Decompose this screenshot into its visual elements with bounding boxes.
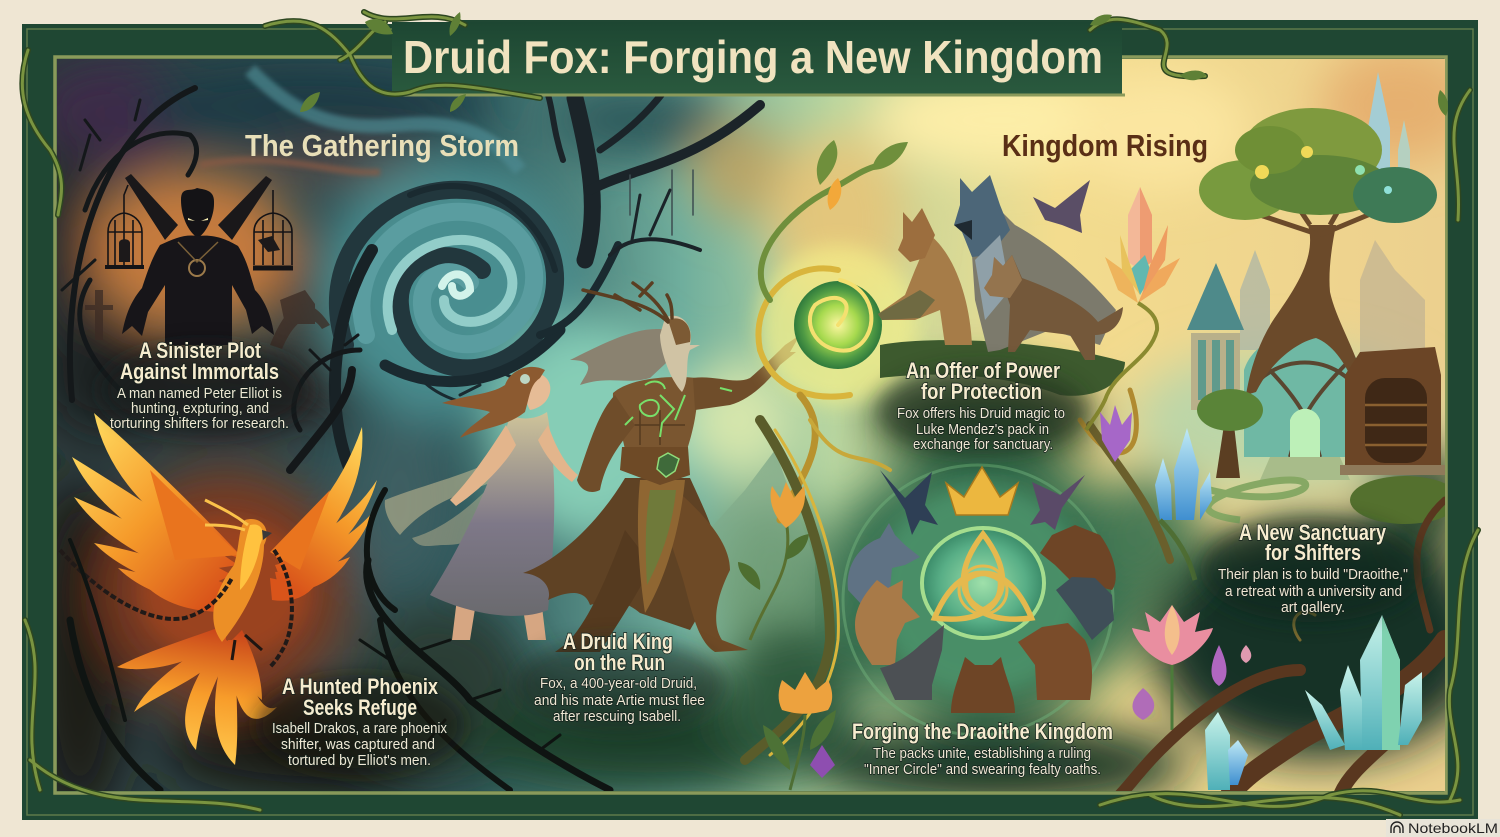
heading: Kingdom Rising: Kingdom Rising [1002,128,1208,163]
icon: violet bud [1211,645,1227,686]
icon: orange tulip lower [779,672,832,714]
text block: A Sinister Plot: torturing shifters for research. [110,415,289,432]
text block: A Druid King: and his mate Artie must flee [534,692,705,709]
icon: gold crown [946,467,1018,515]
text block: A Druid King: after rescuing Isabell. [553,708,681,725]
council circle emblem [843,465,1116,735]
gnarled roots [1120,500,1445,795]
text block: A Sinister Plot: A Sinister Plot [139,338,262,363]
icon: tall crystal spire [1368,72,1390,170]
lotus and small flowers [763,605,1251,790]
text block: An Offer of Power: for Protection [921,379,1042,404]
rock hill [880,340,1125,396]
icon: blue crystals [1155,428,1212,580]
black thorn vines foreground [70,490,610,790]
text block: A Sinister Plot: A man named Peter Elliot is [117,385,282,402]
icon: purple flower [1100,405,1132,462]
dress [430,412,554,616]
head [527,374,550,410]
text block: An Offer of Power: Fox offers his Druid magic to [897,405,1065,422]
icon: raven left [880,470,938,535]
icon: grey wolf head [848,523,920,610]
banner plate [392,22,1122,95]
icon: pink bud [1241,645,1251,663]
storm clouds streaks [200,70,520,172]
text block: A New Sanctuary: art gallery. [1281,599,1345,616]
golden vines and green orb of magic [745,140,1170,760]
icon: left cage [105,185,144,267]
text block: A Hunted Phoenix [255,674,465,775]
text block: A Hunted Phoenix: Seeks Refuge [303,695,417,720]
text block: A Druid King: Fox, a 400-year-old Druid, [540,675,697,692]
mountains behind the druid [733,452,815,590]
text block: A Hunted Phoenix: tortured by Elliot's men. [288,752,431,769]
text block: A New Sanctuary: A New Sanctuary [1239,520,1387,545]
small tree [1216,425,1240,478]
title banner [392,22,1125,95]
title: Druid Fox: Forging a New Kingdom [403,31,1103,83]
icon: large teal crystal cluster [1205,615,1422,790]
text block: Forging the Draoithe Kingdom [852,719,1113,778]
icon: howling grey wolf [880,625,944,700]
icon: purple tulip bottom [810,745,835,778]
Druid king Fox [523,283,800,652]
text block: A Hunted Phoenix: A Hunted Phoenix [282,674,439,699]
woman Artie in flowing dress [385,367,578,640]
rear leg [555,530,641,652]
text block: A Hunted Phoenix: shifter, was captured and [281,736,435,753]
text block: A Sinister Plot: hunting, expturing, and [131,400,269,417]
gothic glass arch [1244,333,1364,480]
icon: purple bud [1132,688,1154,720]
icon: phoenix in flames [60,413,377,765]
tail [117,625,277,765]
text block: A Druid King: A Druid King [563,629,673,654]
right arm [693,335,800,410]
icon: lower bear head [1018,623,1092,700]
text block: A Druid King: on the Run [574,650,665,675]
icon: library building [1340,347,1445,475]
text block: Forging the Draoithe Kingdom: Forging the Draoithe Kingdom [852,719,1113,744]
frame leaves [300,12,1448,116]
right top tree, city and library [1187,72,1460,524]
torso [613,377,698,450]
flowing veil [384,468,490,535]
text block: Forging the Draoithe Kingdom: "Inner Circle" and swearing fealty oaths. [864,761,1101,778]
icon: triquetra knot [925,534,1041,635]
text block: An Offer of Power: exchange for sanctuary. [913,436,1053,453]
hair [570,329,666,385]
city spires [1187,240,1425,410]
three wolves on a rock [878,175,1125,396]
icon: brown bear back [951,657,1015,713]
text block: An Offer of Power: An Offer of Power [906,358,1060,383]
dark silhouette of Peter Elliot with cages [105,174,293,345]
NotebookLM badge [1386,819,1500,837]
dead tree with hanging chains [548,90,760,260]
text block: A Sinister Plot [100,338,310,436]
arms [538,425,578,482]
icon: tan wolf head [855,580,920,665]
left wing [72,413,245,612]
body [213,519,267,642]
text block: A Sinister Plot: Against Immortals [120,359,279,384]
vine with orange tulip [738,482,809,640]
great tree [1199,108,1437,395]
icon: raven right [1030,475,1085,530]
icon: graveyard silhouettes [85,290,330,349]
text block: An Offer of Power: Luke Mendez's pack in [916,421,1049,438]
left arm [577,395,635,492]
icon: storm spiral vortex [335,186,618,470]
icon: tan wolf [878,208,972,345]
front leg [672,496,748,652]
icon: rainbow crystal plant [1086,187,1180,430]
icon: top bear head [1040,525,1116,590]
text block: A New Sanctuary: a retreat with a university and [1225,583,1402,600]
text block: A New Sanctuary [1200,518,1424,622]
robe [523,478,725,630]
legs [452,606,546,640]
chains [60,550,232,619]
moss [1350,476,1460,524]
text block: A New Sanctuary: for Shifters [1265,540,1361,565]
thorn branches around the figure [62,88,360,470]
icon: right cage [253,190,293,268]
tabard [638,480,685,613]
beard and head [660,316,700,392]
text block: Forging the Draoithe Kingdom: The packs unite, establishing a ruling [873,745,1091,762]
NotebookLM badge: NotebookLM [1408,820,1498,836]
text block: A Hunted Phoenix: Isabell Drakos, a rare phoenix [272,720,447,737]
icon: grey wolf [954,175,1116,352]
icon: bird head [1056,577,1114,640]
text block: A Druid King [515,629,725,731]
text block: A New Sanctuary: Their plan is to build "Draoithe," [1218,566,1408,583]
icon: raven [1033,180,1090,233]
icon: brown wolf [984,255,1123,360]
heading: The Gathering Storm: The Gathering Storm [245,128,519,163]
belt [620,447,690,485]
text block: An Offer of Power [877,358,1087,454]
right wing [270,427,377,601]
